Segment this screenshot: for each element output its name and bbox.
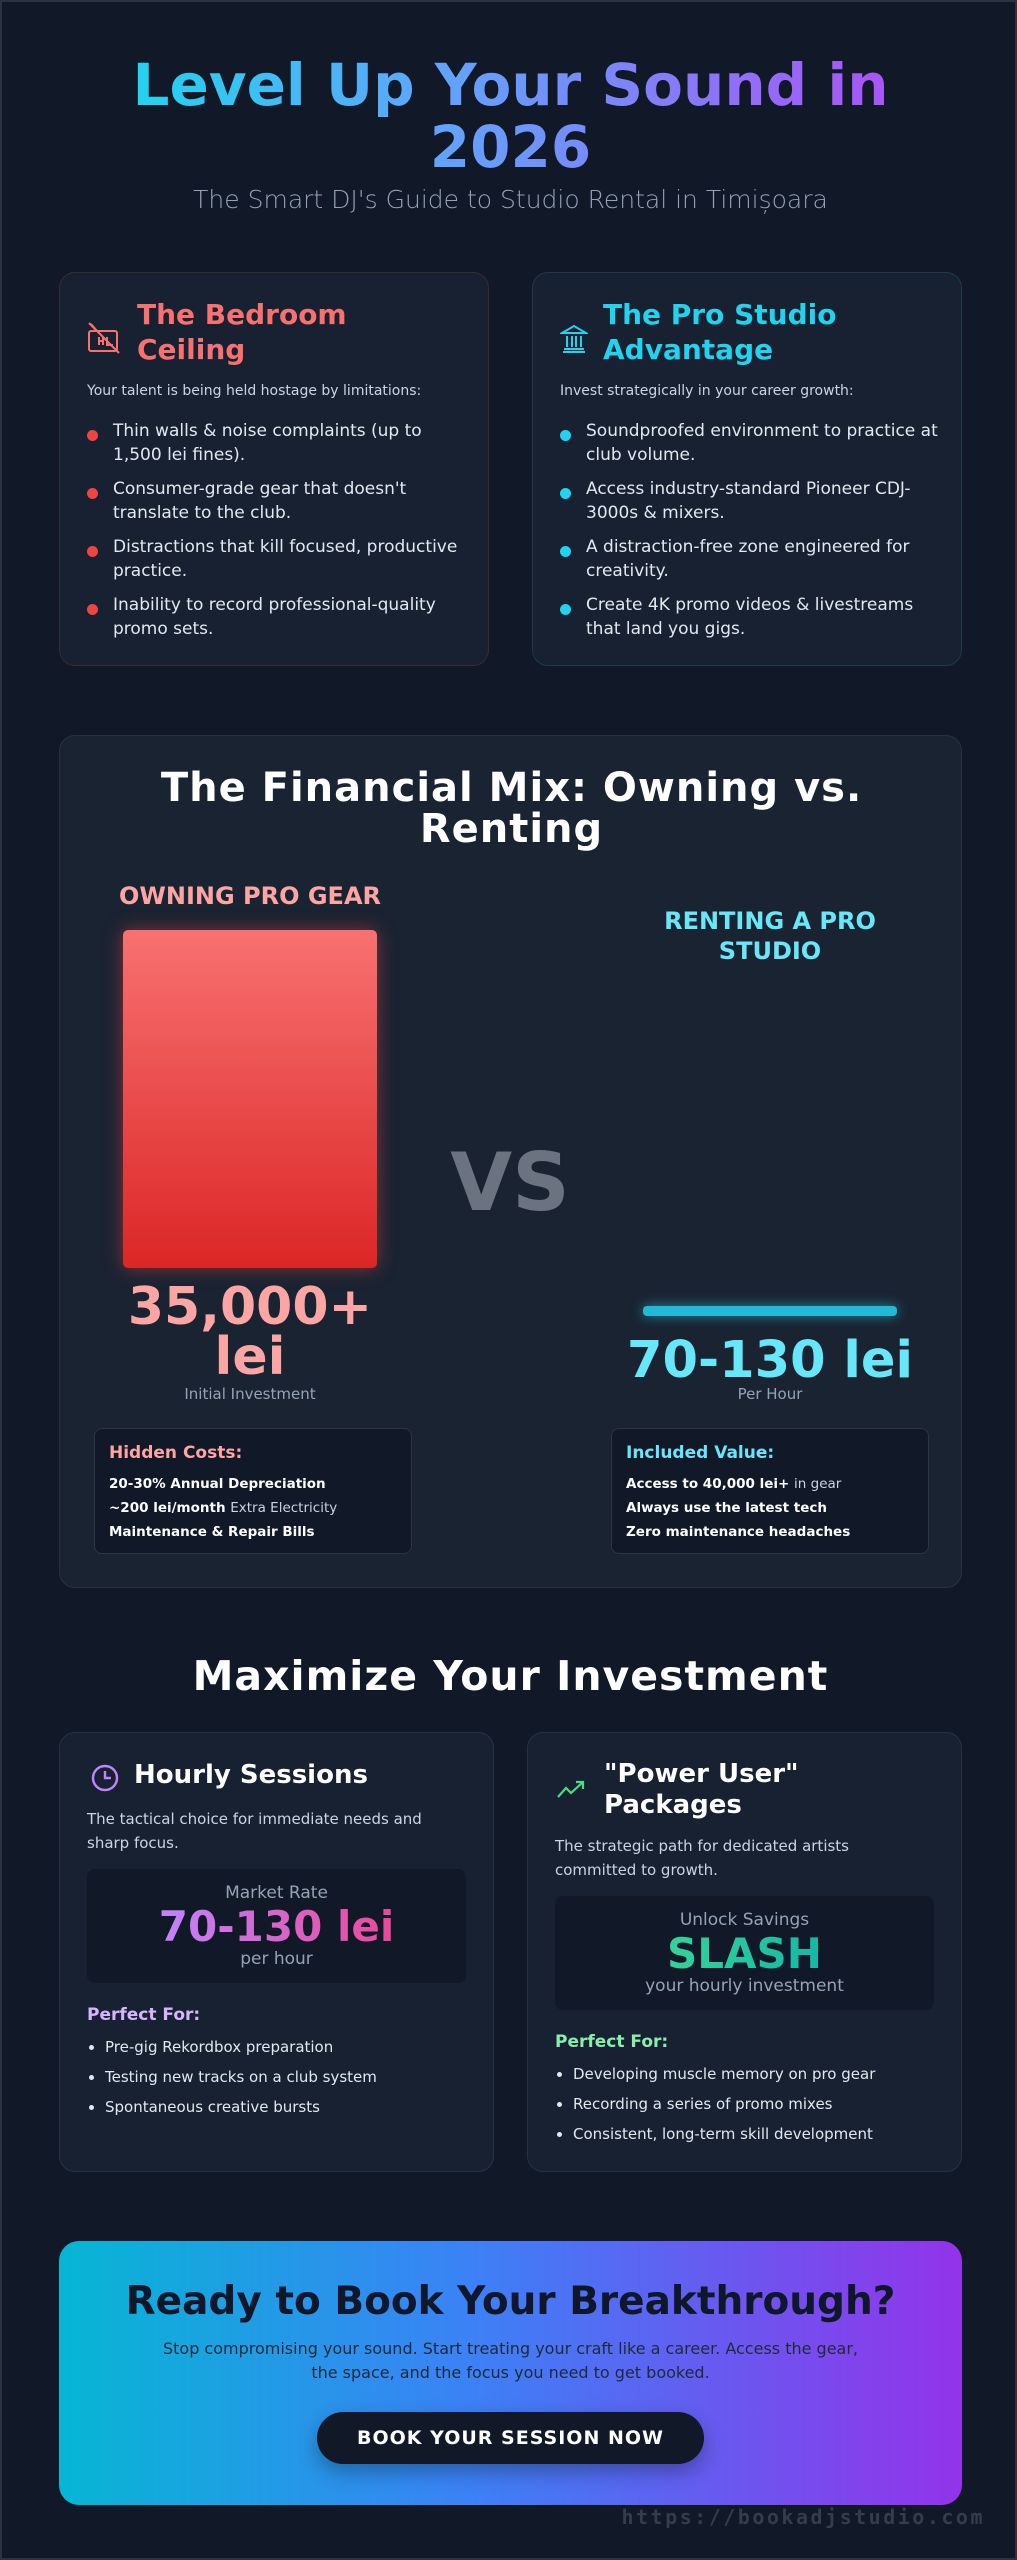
perfect for: Perfect For: bbox=[555, 2032, 668, 2052]
bullet list: Inability to record professional-quality promo sets. bbox=[113, 595, 436, 639]
label bbox=[664, 907, 876, 965]
label: OWNING PRO GEAR bbox=[119, 882, 381, 910]
heading: "Power User" bbox=[604, 1759, 799, 1789]
panel: financial mix bbox=[59, 735, 962, 1588]
price box: per hour bbox=[240, 1949, 313, 1969]
label: STUDIO bbox=[719, 937, 821, 965]
icon: building bbox=[560, 324, 588, 353]
caption: Initial Investment bbox=[184, 1385, 316, 1403]
value: 70-130 lei bbox=[627, 1331, 913, 1390]
button bbox=[317, 2412, 704, 2464]
footer url: https://bookadjstudio.com bbox=[621, 2505, 985, 2529]
bullet list bbox=[560, 421, 938, 639]
label: RENTING A PRO bbox=[664, 907, 876, 935]
panel: power user packages bbox=[527, 1732, 962, 2172]
heading: Ceiling bbox=[137, 333, 245, 366]
title bbox=[132, 51, 888, 181]
intro text: Invest strategically in your career growth: bbox=[560, 383, 854, 399]
list: Recording a series of promo mixes bbox=[573, 2095, 832, 2113]
price box bbox=[87, 1869, 466, 1983]
renting column bbox=[627, 907, 913, 1403]
bar bbox=[643, 1306, 897, 1316]
savings box: your hourly investment bbox=[645, 1976, 844, 1996]
icon: broken tv bbox=[88, 322, 120, 354]
hidden costs box bbox=[94, 1428, 412, 1554]
hidden costs box: 20-30% Annual Depreciation bbox=[109, 1476, 326, 1492]
hidden costs box: ~200 lei/month Extra Electricity bbox=[109, 1500, 337, 1516]
button: BOOK YOUR SESSION NOW bbox=[357, 2427, 664, 2449]
bullet list: A distraction-free zone engineered for creativity. bbox=[586, 537, 910, 581]
heading: Advantage bbox=[603, 333, 773, 366]
description: The strategic path for dedicated artists committed to growth. bbox=[555, 1837, 849, 1879]
heading: Packages bbox=[604, 1790, 742, 1820]
list: Testing new tracks on a club system bbox=[105, 2068, 377, 2086]
panel: hourly sessions bbox=[59, 1732, 494, 2172]
heading bbox=[161, 765, 862, 852]
included value box: Always use the latest tech bbox=[626, 1500, 827, 1516]
included value box: Access to 40,000 lei+ in gear bbox=[626, 1476, 841, 1492]
title: Level Up Your Sound in bbox=[132, 51, 888, 119]
bullet list: Consumer-grade gear that doesn't translate to the club. bbox=[113, 479, 406, 523]
icon: trending up bbox=[557, 1780, 584, 1798]
heading: Hourly Sessions bbox=[134, 1760, 368, 1790]
list: Developing muscle memory on pro gear bbox=[573, 2065, 875, 2083]
cta banner bbox=[59, 2241, 962, 2505]
panel: bedroom ceiling bbox=[59, 272, 489, 666]
savings box: Unlock Savings bbox=[680, 1910, 809, 1930]
value: 35,000+ bbox=[128, 1277, 372, 1337]
list: Spontaneous creative bursts bbox=[105, 2098, 320, 2116]
icon: clock bbox=[92, 1764, 118, 1792]
list: Consistent, long-term skill development bbox=[573, 2125, 873, 2143]
savings box: SLASH bbox=[667, 1929, 822, 1978]
section heading: maximize: Maximize Your Investment bbox=[193, 1652, 828, 1700]
included value box: Zero maintenance headaches bbox=[626, 1524, 850, 1540]
heading: The Financial Mix: Owning vs. bbox=[161, 765, 862, 811]
cta heading: Ready to Book Your Breakthrough? bbox=[126, 2279, 895, 2324]
price box: Market Rate bbox=[225, 1883, 328, 1903]
hidden costs box: Maintenance & Repair Bills bbox=[109, 1524, 315, 1540]
owning column bbox=[111, 882, 389, 1403]
hidden costs box: Hidden Costs: bbox=[109, 1443, 242, 1463]
list: Pre-gig Rekordbox preparation bbox=[105, 2038, 333, 2056]
bar bbox=[123, 930, 377, 1268]
list bbox=[89, 2038, 377, 2116]
heading: Renting bbox=[420, 806, 603, 852]
bullet list: Soundproofed environment to practice at club volume. bbox=[586, 421, 938, 465]
value: lei bbox=[215, 1327, 285, 1387]
cta text: Stop compromising your sound. Start treating your craft like a career. Access the gear, the space, and the focus you need to get booked. bbox=[163, 2339, 858, 2382]
list bbox=[557, 2065, 876, 2143]
subtitle: The Smart DJ's Guide to Studio Rental in Timișoara bbox=[193, 185, 828, 214]
savings box bbox=[555, 1896, 934, 2010]
bullet list: Thin walls & noise complaints (up to 1,500 lei fines). bbox=[113, 421, 422, 465]
value bbox=[128, 1277, 372, 1387]
heading bbox=[137, 298, 347, 366]
heading bbox=[604, 1759, 799, 1820]
caption: Per Hour bbox=[738, 1385, 802, 1403]
included value box: Included Value: bbox=[626, 1443, 774, 1463]
vs: VS bbox=[450, 1136, 570, 1229]
title: 2026 bbox=[430, 113, 591, 181]
bullet list: Access industry-standard Pioneer CDJ-3000s & mixers. bbox=[586, 479, 910, 523]
heading bbox=[603, 298, 836, 366]
intro text: Your talent is being held hostage by limitations: bbox=[87, 383, 421, 399]
description: The tactical choice for immediate needs and sharp focus. bbox=[87, 1810, 422, 1852]
heading: The Pro Studio bbox=[603, 298, 836, 331]
perfect for: Perfect For: bbox=[87, 2005, 200, 2025]
heading: The Bedroom bbox=[137, 298, 347, 331]
bullet list bbox=[87, 421, 457, 639]
included value box bbox=[611, 1428, 929, 1554]
bullet list: Create 4K promo videos & livestreams that land you gigs. bbox=[586, 595, 913, 639]
bullet list: Distractions that kill focused, productive practice. bbox=[113, 537, 457, 581]
panel: pro studio advantage bbox=[532, 272, 962, 666]
price box: 70-130 lei bbox=[159, 1902, 394, 1951]
